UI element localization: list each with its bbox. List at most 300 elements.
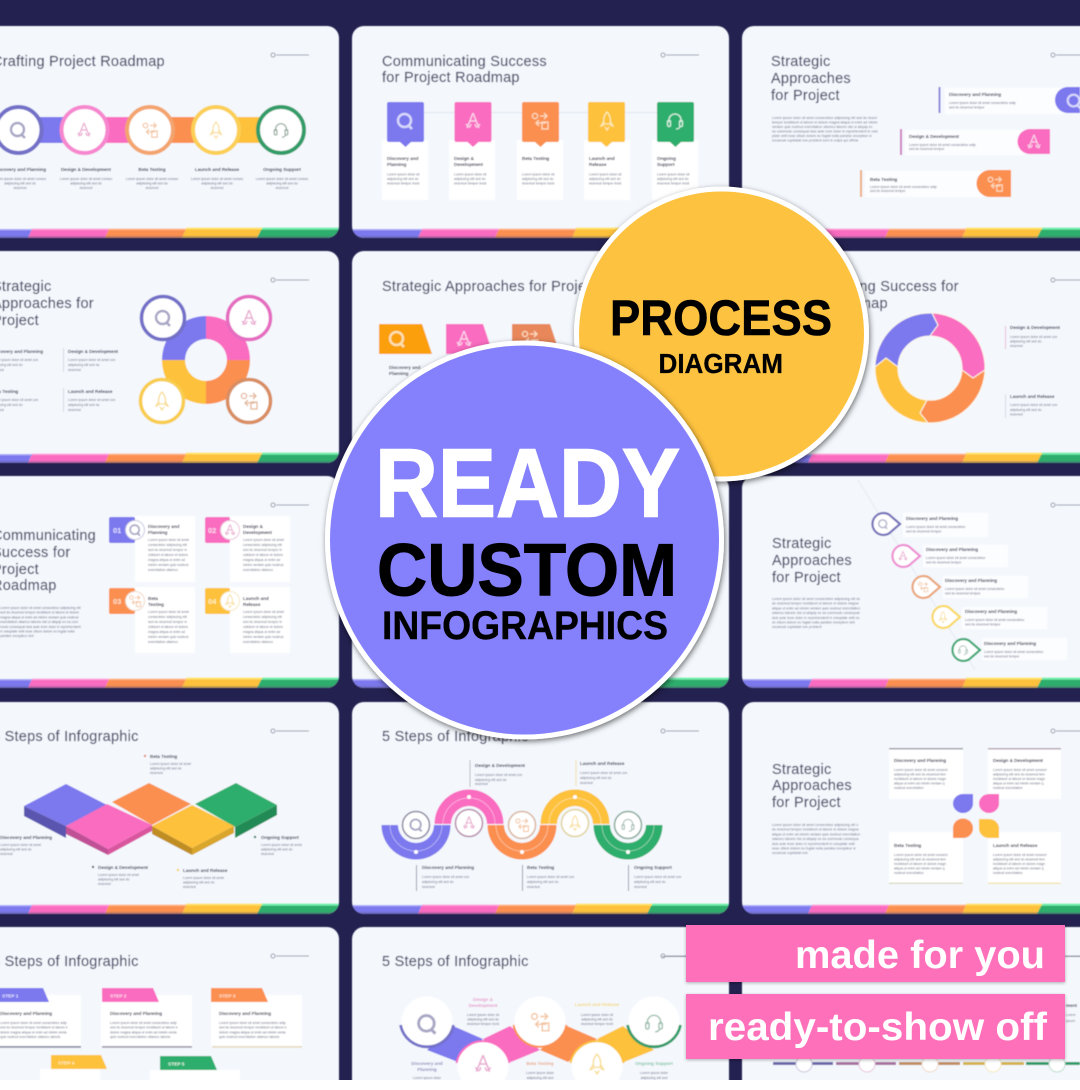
intro text: do eiusmod tempor incididunt ut labore et dolore magna xyxy=(772,602,859,606)
step cards: Lorem ipsum dolor sit amet consectetur adip xyxy=(110,1021,177,1025)
card: donut with four circles xyxy=(0,251,339,463)
numbered items: Lorem ipsum dolor sit amet xyxy=(148,610,189,614)
step labels: adipiscing elit sed do xyxy=(136,182,168,186)
banner: ready-to-show off xyxy=(686,994,1065,1059)
card: communicating success roadmap pins xyxy=(352,26,729,238)
intro text: Lorem ipsum dolor sit amet consectetur adipiscing elit se xyxy=(772,597,860,601)
step labels: Lorem ipsum dolor sit amet consec xyxy=(126,177,179,181)
stair items: sed do eiusmod tempor xyxy=(949,106,985,110)
heading: strategic approaches: Strategic xyxy=(772,762,831,778)
wave labels: adipiscing elit sed do xyxy=(527,880,559,884)
step cards: Discovery and Planning xyxy=(110,1011,162,1016)
step cards: Lorem ipsum dolor sit amet consectetur adip xyxy=(0,1021,67,1025)
intro text: occaecat cupidatat non proident xyxy=(772,625,822,629)
isometric tiles xyxy=(24,783,277,855)
tile labels: Launch and Release xyxy=(183,868,228,873)
wave labels: Design & Development xyxy=(475,763,526,768)
numbered items xyxy=(109,516,290,653)
numbered items: 03 xyxy=(113,597,121,606)
timeline xyxy=(773,1056,1080,1072)
tab shapes: Discovery and xyxy=(389,365,420,370)
tile labels: Design & Development xyxy=(98,865,149,870)
pin cards: Lorem ipsum dolor sit xyxy=(387,172,419,176)
pin cards: Planning xyxy=(387,162,407,167)
wave labels: Discovery and Planning xyxy=(422,865,474,870)
pin cards: Launch and xyxy=(589,156,615,161)
pin cards: Lorem ipsum dolor sit xyxy=(522,172,554,176)
card: isometric steps xyxy=(0,702,339,914)
heading: strategic approaches: Strategic xyxy=(772,536,831,552)
ribbon labels: eiusmod tempor incid xyxy=(581,1022,613,1026)
numbered items: minim veniam quis nostrud xyxy=(148,635,188,639)
numbered items: minim veniam quis nostrud xyxy=(243,635,283,639)
partial label: ment xyxy=(1066,1003,1077,1008)
pin cards: Lorem ipsum dolor sit xyxy=(454,172,486,176)
teardrop items: Discovery and Planning xyxy=(984,641,1036,646)
numbered items: Discovery and xyxy=(148,524,179,529)
card: wave steps xyxy=(352,702,729,914)
stair items: sed do eiusmod tempor xyxy=(909,147,945,151)
step labels: adipiscing elit sed do xyxy=(70,182,102,186)
pin cards: adipiscing elit sed do xyxy=(522,177,554,181)
heading: strategic approaches: Approaches xyxy=(772,778,852,794)
ribbon labels: adipiscing elit sed xyxy=(641,1076,667,1080)
tile labels xyxy=(0,754,302,889)
tile labels: adipiscing elit sed do xyxy=(98,878,130,882)
donut labels xyxy=(1005,325,1061,418)
tab shapes xyxy=(379,324,560,376)
card: four petals xyxy=(742,702,1080,914)
four text cards: adipiscing elit sed do eiusmod tem xyxy=(993,858,1045,862)
pin cards: adipiscing elit sed do xyxy=(589,177,621,181)
step cards: STEP 2 xyxy=(110,994,127,1000)
step cards: STEP 5 xyxy=(168,1062,185,1068)
intro text: in voluptate velit esse cillum dolore eu fugiat nulla xyxy=(0,630,75,634)
numbered items: sed do eiusmod tempor in xyxy=(148,548,187,552)
donut labels: Launch and Release xyxy=(1010,394,1055,399)
four text cards: aliqua ut enim ad minim veniam q xyxy=(993,866,1044,870)
pin cards: Discovery and xyxy=(387,156,418,161)
numbered items: magna aliqua ut enim ad xyxy=(243,630,280,634)
stair items: Design & Development xyxy=(909,134,960,139)
heading: communicating success: Communicating Success xyxy=(382,54,547,70)
step labels: adipiscing elit sed do xyxy=(266,182,298,186)
four text cards: nostrud exercitation xyxy=(894,786,924,790)
wave labels: adipiscing elit sed do xyxy=(634,880,666,884)
step labels: eiusmod xyxy=(276,186,289,190)
pin cards: Support xyxy=(657,162,675,167)
step cards: sed do eiusmod tempor incididunt ut labore e xyxy=(219,1026,287,1030)
intro text: ptate velit esse cillum dolore eu fugiat nulla pariatur excepteur si xyxy=(772,134,872,138)
step labels: Lorem ipsum dolor sit amet consec xyxy=(191,177,244,181)
intro text: ea commodo consequat duis aute irure dolor in reprehenderit in volu xyxy=(772,130,878,134)
four text cards: Discovery and Planning xyxy=(894,758,946,763)
donut labels: eiusmod xyxy=(1010,344,1023,348)
intro text: veniam quis nostrud exercitation ullamco laboris nisi ut aliquip ex xyxy=(772,125,873,129)
banner: made for you xyxy=(686,925,1065,982)
step labels: Lorem ipsum dolor sit amet consec xyxy=(60,177,113,181)
intro text: duis aute irure dolor in reprehenderit in voluptate velit xyxy=(772,842,855,846)
numbered items: Lorem ipsum dolor sit amet xyxy=(148,538,189,542)
ribbon labels: eiusmod tempor incid xyxy=(467,1022,499,1026)
partial body text: ipsum xyxy=(1066,1019,1075,1023)
four text cards: aliqua ut enim ad minim veniam q xyxy=(894,866,945,870)
heading: communicating success: for Project Roadmap xyxy=(382,70,520,86)
wave labels: Lorem ipsum dolor sit amet con xyxy=(634,875,681,879)
heading: communicating success for project roadmap: Project Roadmap xyxy=(772,296,888,312)
step labels: Launch and Release xyxy=(195,167,240,172)
wave labels: adipiscing elit sed do xyxy=(475,778,507,782)
numbered items: exercitation ullamco xyxy=(243,568,273,572)
four text cards: Lorem ipsum dolor sit amet consect xyxy=(993,853,1047,857)
card: step tabs xyxy=(0,927,339,1090)
numbered items: 02 xyxy=(208,526,216,535)
tile labels: eiusmod xyxy=(98,882,111,886)
numbered items: Lorem ipsum dolor sit amet xyxy=(243,610,284,614)
tile labels: eiusmod xyxy=(261,852,274,856)
stair items: sed do eiusmod tempor xyxy=(870,189,906,193)
intro text: magna aliqua ut enim ad minim veniam quis nostrud xyxy=(0,615,79,619)
four labels: Lorem ipsum dolor sit amet con xyxy=(68,358,115,362)
teardrop items: Discovery and Planning xyxy=(965,609,1017,614)
heading: strategic approaches: Approaches xyxy=(772,553,852,569)
numbered items: sed do eiusmod tempor in xyxy=(243,548,282,552)
step labels: eiusmod xyxy=(211,186,224,190)
intro text: aliqua ut enim ad minim veniam quis nostrud exercitation xyxy=(772,832,860,836)
intro text: do eiusmod tempor incididunt ut labore et dolore magna xyxy=(772,828,859,832)
donut labels: adipiscing elit sed do xyxy=(1010,340,1042,344)
heading: strategic approaches: Approaches xyxy=(771,71,851,87)
numbered items: consectetur adipiscing elit xyxy=(148,543,187,547)
intro text xyxy=(772,823,860,855)
numbered items: Beta xyxy=(148,596,158,601)
numbered items: cididunt ut labore et dolore xyxy=(243,553,283,557)
ribbon labels: Design & xyxy=(473,997,493,1002)
numbered items: Release xyxy=(243,602,261,607)
intro text: tempor incididunt ut labore et dolore magna aliqua ut enim ad minim xyxy=(772,120,878,124)
ribbon labels: Discovery and xyxy=(411,1061,443,1066)
step cards xyxy=(0,988,302,1081)
wave labels: eiusmod xyxy=(527,885,540,889)
ribbon labels: adipiscing elit sed do xyxy=(581,1018,613,1022)
teardrop items: Lorem ipsum dolor sit amet consectetur xyxy=(906,525,966,529)
tile labels: eiusmod xyxy=(183,885,196,889)
teardrop items: Discovery and Planning xyxy=(906,516,958,521)
intro text: Lorem ipsum dolor sit amet consectetur adipiscing elit sed do eiusm xyxy=(772,116,877,120)
pin cards: eiusmod tempor incid xyxy=(657,182,689,186)
ribbon labels: Beta Testing xyxy=(526,1061,554,1066)
ribbon labels: Lorem ipsum dolor sit xyxy=(581,1013,613,1017)
heading: strategic approaches: Strategic xyxy=(771,54,830,70)
four text cards: nostrud exercitation xyxy=(993,871,1023,875)
numbered items: magna aliqua ut enim ad xyxy=(148,630,185,634)
step labels: Lorem ipsum dolor sit amet consec xyxy=(256,177,309,181)
numbered items: Testing xyxy=(148,602,164,607)
step cards: STEP 3 xyxy=(219,994,236,1000)
teardrop items: Lorem ipsum dolor sit amet consectetur xyxy=(926,556,986,560)
wave labels: Lorem ipsum dolor sit amet con xyxy=(580,771,627,775)
step cards: Discovery and Planning xyxy=(0,1011,52,1016)
four labels: Launch and Release xyxy=(68,389,113,394)
ribbon labels: Launch and Release xyxy=(575,1002,620,1007)
step labels: adipiscing elit sed do xyxy=(201,182,233,186)
teardrop items: sed do eiusmod tempor xyxy=(926,560,962,564)
intro text: Lorem ipsum dolor sit amet consectetur adipiscing elit s xyxy=(772,823,858,827)
step cards: Lorem ipsum dolor sit amet consectetur adip xyxy=(219,1021,286,1025)
ribbon labels: adipiscing elit sed xyxy=(527,1076,553,1080)
four text cards xyxy=(889,748,1061,884)
tile labels: Ongoing Support xyxy=(261,835,299,840)
chevron donut xyxy=(875,313,985,423)
numbered items: sed do eiusmod tempor in xyxy=(243,620,282,624)
card: strategic approaches tabs xyxy=(352,251,729,463)
four text cards: adipiscing elit sed do eiusmod tem xyxy=(894,772,946,776)
numbered items: Lorem ipsum dolor sit amet xyxy=(243,538,284,542)
numbered items: Planning xyxy=(148,530,168,535)
card: hidden centre slide xyxy=(352,476,729,688)
wave labels: Ongoing Support xyxy=(634,865,672,870)
heading: strategic approaches: for Project xyxy=(772,570,841,586)
tile labels: eiusmod xyxy=(0,852,13,856)
wave labels: Lorem ipsum dolor sit amet con xyxy=(475,773,522,777)
wave labels: Beta Testing xyxy=(527,865,554,870)
tile labels: adipiscing elit sed do xyxy=(150,766,182,770)
pin cards: Lorem ipsum dolor sit xyxy=(589,172,621,176)
pin cards: adipiscing elit sed do xyxy=(387,177,419,181)
teardrop items: Discovery and Planning xyxy=(945,578,997,583)
wave labels: Lorem ipsum dolor sit amet con xyxy=(527,875,574,879)
step cards: STEP 4 xyxy=(58,1060,75,1066)
tile labels: Discovery and Planning xyxy=(0,835,52,840)
four text cards: nostrud exercitation xyxy=(894,871,924,875)
intro text: Lorem ipsum dolor sit amet consectetur adipiscing elit xyxy=(0,606,81,610)
four text cards: Design & Development xyxy=(993,758,1044,763)
pin cards: eiusmod tempor incid xyxy=(589,182,621,186)
step labels: eiusmod xyxy=(146,186,159,190)
numbered items: consectetur adipiscing elit xyxy=(243,543,282,547)
tile labels: adipiscing elit sed do xyxy=(0,848,32,852)
teardrop items: sed do eiusmod tempor xyxy=(945,592,981,596)
four labels: Lorem ipsum dolor sit amet con xyxy=(68,398,115,402)
teardrop items: Lorem ipsum dolor sit amet consectetur xyxy=(984,650,1044,654)
ribbon labels: Lorem ipsum dolor xyxy=(640,1071,669,1075)
diagonal guide xyxy=(858,480,975,670)
ready label: READY xyxy=(375,428,680,538)
stair items: Lorem ipsum dolor sit amet consectetur adip xyxy=(870,185,937,189)
pin cards: Ongoing xyxy=(657,156,676,161)
intro text: pariatur excepteur sint xyxy=(0,634,34,638)
heading: strategic approaches tabs: Strategic Approaches for Project xyxy=(382,279,598,295)
donut labels: Lorem ipsum dolor sit amet con xyxy=(1010,403,1057,407)
numbered items: minim veniam quis nostrud xyxy=(148,563,188,567)
card: teardrop staircase xyxy=(742,476,1080,688)
tile labels: adipiscing elit sed do xyxy=(261,848,293,852)
four text cards: aliqua ut enim ad minim veniam q xyxy=(894,782,945,786)
card: ribbon steps xyxy=(352,927,729,1090)
pin cards: eiusmod tempor incid xyxy=(387,182,419,186)
numbered items: cididunt ut labore et dolore xyxy=(243,625,283,629)
step cards: sed do eiusmod tempor incididunt ut labore e xyxy=(0,1026,68,1030)
step labels: Ongoing Support xyxy=(263,167,301,172)
numbered items: consectetur adipiscing elit xyxy=(243,615,282,619)
partial body text xyxy=(1066,1013,1076,1023)
pin cards: Release xyxy=(589,162,607,167)
logo line xyxy=(662,956,690,957)
four text cards: incididunt ut labore et dolore magn xyxy=(993,777,1045,781)
four labels: adipiscing elit sed do xyxy=(68,363,100,367)
wave labels: eiusmod xyxy=(475,782,488,786)
process label: PROCESS xyxy=(610,289,832,346)
numbered items: Launch and xyxy=(243,596,269,601)
tile labels: Lorem ipsum dolor sit amet xyxy=(183,876,224,880)
badge: process diagram xyxy=(574,186,869,482)
wave labels: adipiscing elit sed do xyxy=(580,776,612,780)
numbered items: Development xyxy=(243,530,272,535)
connector line xyxy=(400,112,680,113)
intro text: exercitation ullamco laboris nisi ut aliquip ex ea com xyxy=(0,620,78,624)
tile labels: Lorem ipsum dolor sit amet xyxy=(98,873,139,877)
four text cards: Lorem ipsum dolor sit amet consect xyxy=(993,768,1047,772)
card: communicating success chevron donut xyxy=(742,251,1080,463)
card: strategic approaches staircase xyxy=(742,26,1080,238)
step cards: quis nostrud exercitation ullamco laboris xyxy=(219,1035,280,1039)
intro text xyxy=(0,606,81,638)
heading: communicating success for project roadmap: Communicating Success for xyxy=(772,279,959,295)
step cards: dolore magna aliqua ut enim ad minim venia xyxy=(110,1030,177,1034)
card: numbered four boxes xyxy=(0,476,339,688)
wave ribbon xyxy=(382,790,662,860)
chain diagram xyxy=(0,107,304,153)
ribbon labels: Ongoing Support xyxy=(635,1061,673,1066)
numbered items: sed do eiusmod tempor in xyxy=(148,620,187,624)
numbered items: 04 xyxy=(208,597,217,606)
pin cards: eiusmod tempor incid xyxy=(522,182,554,186)
intro text: aliqua ut enim ad minim veniam quis nostrud exercitation xyxy=(772,606,860,610)
four text cards: aliqua ut enim ad minim veniam q xyxy=(993,782,1044,786)
intro text: duis aute irure dolor in reprehenderit in voluptate velit es xyxy=(772,616,860,620)
pin cards: Beta Testing xyxy=(522,156,549,161)
teardrop items: Discovery and Planning xyxy=(926,547,978,552)
pin cards: Development xyxy=(454,162,483,167)
top label line xyxy=(1062,956,1080,957)
numbered items: minim veniam quis nostrud xyxy=(243,563,283,567)
intro text: ullamco laboris nisi ut aliquip ex ea commodo consequa xyxy=(772,837,859,841)
four labels: adipiscing elit sed do xyxy=(68,403,100,407)
ribbon labels xyxy=(411,997,673,1080)
card: crafting project roadmap xyxy=(0,26,339,238)
step cards: Discovery and Planning xyxy=(219,1011,271,1016)
teardrop items: sed do eiusmod tempor xyxy=(965,622,1001,626)
custom label: CUSTOM xyxy=(377,528,677,612)
wave labels: Lorem ipsum dolor sit amet con xyxy=(422,875,469,879)
wave labels: eiusmod xyxy=(634,885,647,889)
pin cards: eiusmod tempor incid xyxy=(454,182,486,186)
intro text xyxy=(772,597,860,629)
numbered items: magna aliqua ut enim ad xyxy=(148,558,185,562)
banner text: made for you: made for you xyxy=(795,934,1045,977)
pin cards: adipiscing elit sed do xyxy=(454,177,486,181)
stair items: Beta Testing xyxy=(870,177,897,182)
step labels: eiusmod xyxy=(14,186,27,190)
step cards: dolore magna aliqua ut enim ad minim venia xyxy=(0,1030,67,1034)
pin cards: Lorem ipsum dolor sit xyxy=(657,172,689,176)
numbered items: exercitation ullamco xyxy=(148,640,178,644)
step cards: dolore magna aliqua ut enim ad minim venia xyxy=(219,1030,286,1034)
step labels: adipiscing elit sed do xyxy=(4,182,36,186)
numbered items: Design & xyxy=(243,524,263,529)
four text cards: Lorem ipsum dolor sit amet consect xyxy=(894,853,948,857)
stair items xyxy=(860,87,1080,197)
four labels: Design & Development xyxy=(68,349,119,354)
four text cards: Beta Testing xyxy=(894,843,921,848)
badge: ready custom infographics xyxy=(325,340,724,740)
tile labels: Lorem ipsum dolor sit amet xyxy=(0,843,41,847)
step labels xyxy=(0,167,309,190)
tile labels: adipiscing elit sed do xyxy=(183,880,215,884)
donut labels: Lorem ipsum dolor sit amet con xyxy=(1010,335,1057,339)
heading: strategic approaches: for Project xyxy=(772,795,841,811)
ribbon labels: Lorem ipsum dolor sit xyxy=(467,1013,499,1017)
four text cards: adipiscing elit sed do eiusmod tem xyxy=(894,858,946,862)
teardrop items: sed do eiusmod tempor xyxy=(906,530,942,534)
numbered items: magna aliqua ut enim ad xyxy=(243,558,280,562)
intro text xyxy=(772,116,878,142)
ribbon xyxy=(400,996,680,1090)
tile labels: Lorem ipsum dolor sit amet xyxy=(150,762,191,766)
infographics label: INFOGRAPHICS xyxy=(382,604,668,648)
four text cards: nostrud exercitation xyxy=(993,786,1023,790)
ribbon labels: Lorem ipsum dolor xyxy=(526,1071,555,1075)
banner text: ready-to-show off: ready-to-show off xyxy=(708,1006,1048,1049)
stair items: Lorem ipsum dolor sit amet consectetur adip xyxy=(949,101,1016,105)
heading: 5 steps wave: 5 Steps of Infographic xyxy=(382,729,529,745)
heading: 5 steps ribbon: 5 Steps of Infographic xyxy=(382,954,529,970)
numbered items: consectetur adipiscing elit xyxy=(148,615,187,619)
step cards: quis nostrud exercitation ullamco laboris xyxy=(0,1035,61,1039)
ribbon labels: adipiscing elit sed do xyxy=(467,1018,499,1022)
pin cards xyxy=(382,102,698,200)
numbered items: 01 xyxy=(113,526,121,535)
step labels: Beta Testing xyxy=(138,167,166,172)
step cards: STEP 1 xyxy=(2,994,19,1000)
four labels: eiusmod xyxy=(68,408,81,412)
wave labels: Launch and Release xyxy=(580,761,625,766)
four petals xyxy=(953,794,999,838)
teardrop items xyxy=(872,513,1067,661)
step cards: quis nostrud exercitation ullamco laboris xyxy=(110,1035,171,1039)
intro text: sed do eiusmod tempor incididunt ut labore et dolore xyxy=(0,611,79,615)
intro text: modo consequat duis aute irure dolor in reprehenderit xyxy=(0,625,81,629)
four text cards: incididunt ut labore et dolore magn xyxy=(894,777,946,781)
four labels xyxy=(0,348,119,412)
step cards: sed do eiusmod tempor incididunt ut labore e xyxy=(110,1026,178,1030)
four text cards: incididunt ut labore et dolore magn xyxy=(894,862,946,866)
numbered items: exercitation ullamco xyxy=(243,640,273,644)
pin cards: adipiscing elit sed do xyxy=(657,177,689,181)
four text cards: adipiscing elit sed do eiusmod tem xyxy=(993,772,1045,776)
tile labels: eiusmod xyxy=(150,771,163,775)
numbered items: exercitation ullamco xyxy=(148,568,178,572)
ribbon labels: Development xyxy=(469,1003,498,1008)
four text cards: Launch and Release xyxy=(993,843,1038,848)
diagram label: DIAGRAM xyxy=(658,348,783,379)
intro text: ullamco laboris nisi ut aliquip ex ea commodo consequat xyxy=(772,611,860,615)
numbered items: cididunt ut labore et dolore xyxy=(148,625,188,629)
donut chart with circles xyxy=(140,296,270,422)
ribbon labels: Lorem ipsum dolor xyxy=(413,1076,442,1080)
teardrop items: Lorem ipsum dolor sit amet consectetur xyxy=(965,618,1025,622)
four text cards: Lorem ipsum dolor sit amet consect xyxy=(894,768,948,772)
